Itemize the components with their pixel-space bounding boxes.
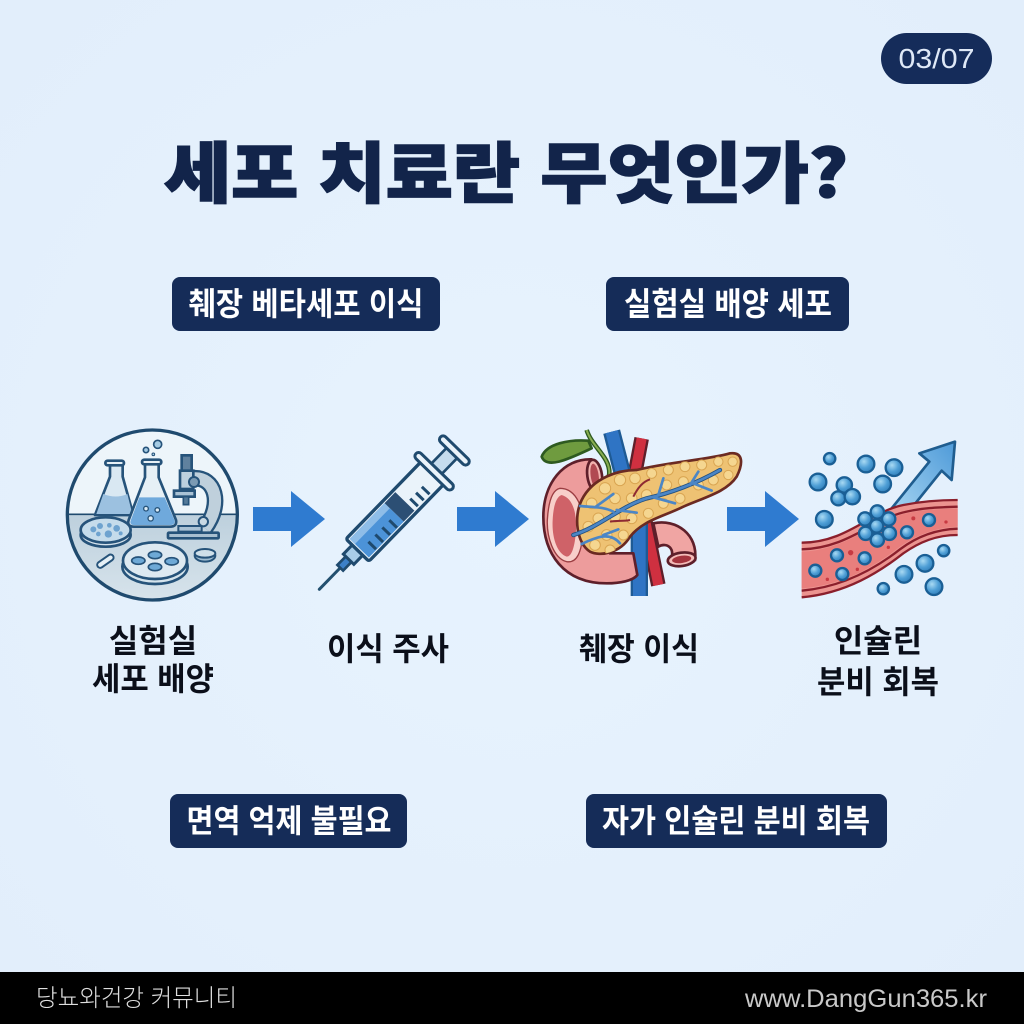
tag: lab cultured cells: 실험실 배양 세포 <box>624 286 832 322</box>
caption: pancreas transplant: 췌장 이식 <box>579 631 699 667</box>
pancreas body <box>577 453 741 554</box>
arrow 1 <box>253 491 325 547</box>
icon: syringe <box>301 430 475 607</box>
gallbladder <box>542 440 592 463</box>
icon: laboratory culture <box>67 430 240 604</box>
middle flask <box>128 462 176 527</box>
duodenum <box>543 459 637 583</box>
tag: lab cultured cells <box>606 277 849 331</box>
icon: pancreas <box>542 430 741 596</box>
caption: lab cell culture: 세포 배양 <box>92 661 214 697</box>
left flask <box>95 463 133 515</box>
lower right intestine <box>653 522 695 562</box>
pill <box>96 553 115 569</box>
bottom dish <box>121 562 189 586</box>
caption: transplant injection: 이식 주사 <box>327 631 449 667</box>
arrow 3 <box>727 491 799 547</box>
tag: no immunosuppression <box>170 794 407 848</box>
growth arrow <box>892 442 955 518</box>
tag: pancreatic beta cell transplant: 췌장 베타세포 이식 <box>188 286 424 322</box>
page badge: 03/07 <box>898 43 974 74</box>
left dish <box>79 532 132 548</box>
caption: insulin secretion recovery <box>817 623 939 700</box>
title: 세포 치료란 무엇인가? <box>164 121 848 217</box>
ducts <box>610 479 650 522</box>
footer bar <box>0 972 1024 1024</box>
caption: lab cell culture: 실험실 <box>109 623 197 659</box>
small dish <box>194 554 216 563</box>
microscope <box>193 478 215 528</box>
tag: own insulin secretion recovery: 자가 인슐린 분비 회복 <box>602 803 870 839</box>
blood vessel <box>802 500 958 597</box>
tag: own insulin secretion recovery <box>586 794 887 848</box>
bubbles <box>154 440 162 448</box>
tag: no immunosuppression: 면역 억제 불필요 <box>186 803 392 839</box>
footer bar: 당뇨와건강 커뮤니티 <box>36 985 237 1012</box>
insulin spheres <box>809 453 949 595</box>
footer bar: www.DangGun365.kr <box>744 985 987 1013</box>
lower vessels <box>645 520 658 585</box>
page badge <box>881 33 992 84</box>
caption: insulin secretion recovery: 분비 회복 <box>817 664 939 700</box>
tag: pancreatic beta cell transplant <box>172 277 440 331</box>
upper vessels <box>635 438 642 473</box>
arrow 2 <box>457 491 529 547</box>
caption: lab cell culture <box>92 623 214 697</box>
icon: insulin secretion <box>802 442 958 597</box>
caption: insulin secretion recovery: 인슐린 <box>834 623 922 659</box>
